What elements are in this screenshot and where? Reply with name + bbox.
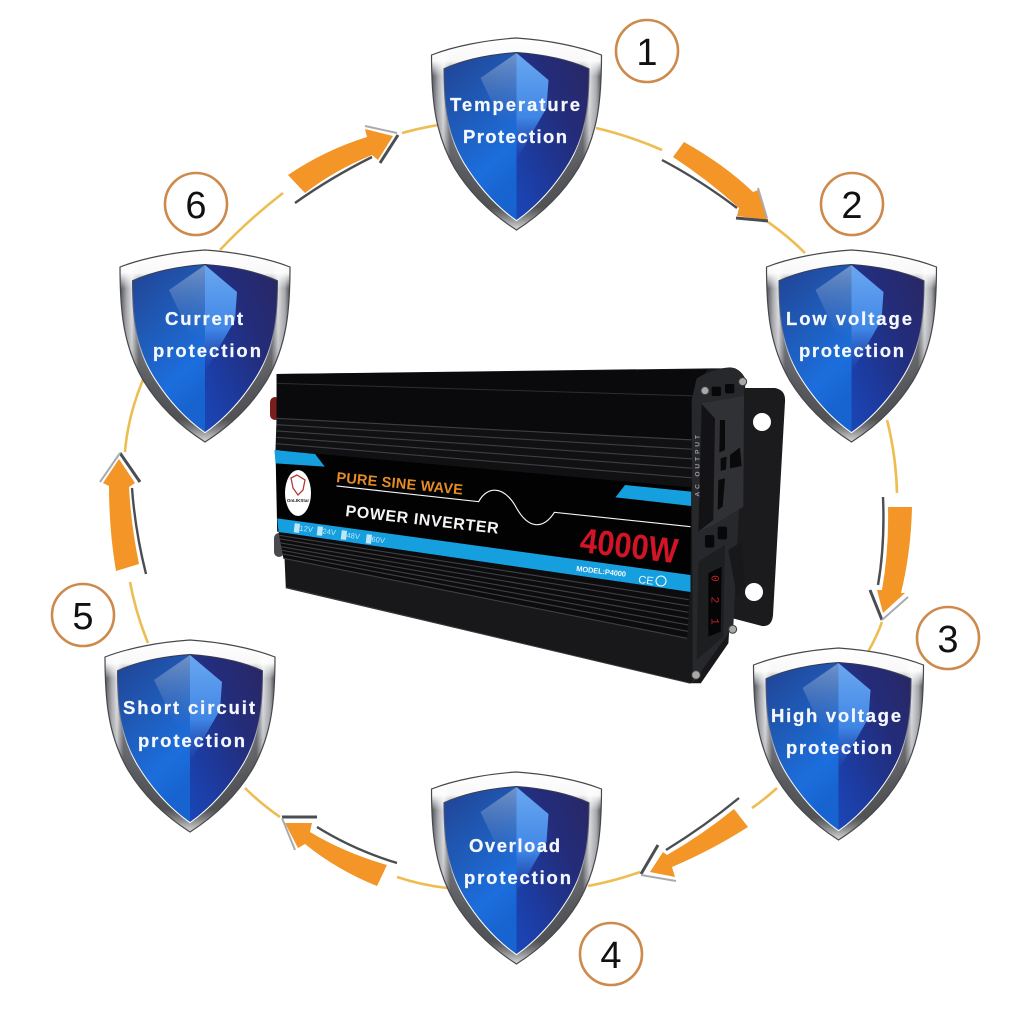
number badge 6 (165, 173, 227, 235)
number badge 1 (616, 20, 678, 82)
screws (692, 378, 747, 679)
digital display: 021 (708, 575, 720, 625)
arrow: 1 to 2 (662, 142, 768, 221)
voltage options: █48V (341, 530, 360, 542)
ring connector: yellow arc segments (125, 125, 897, 888)
logo badge: OnLIKStar (287, 498, 309, 503)
number badge 1: 1 (636, 32, 658, 74)
number badge 5: 5 (72, 596, 94, 638)
shield 4: Overload protection (432, 772, 602, 964)
shield 3: High voltage protection: High voltage (771, 705, 901, 726)
shield 6: Current protection: Current (165, 308, 243, 329)
number badge 2: 2 (841, 185, 863, 227)
number badge 6: 6 (185, 185, 207, 227)
model and marks: CE (638, 574, 654, 588)
heading: power inverter: POWER INVERTER (345, 503, 500, 538)
voltage options: █12V (294, 523, 313, 535)
shield 5: Short circuit protection (105, 640, 275, 832)
mounting bracket (720, 388, 785, 626)
logo badge (285, 470, 311, 516)
number badge 3: 3 (937, 619, 959, 661)
model and marks: MODEL:P4000 (576, 564, 626, 579)
terminals (270, 397, 284, 557)
AC output label: AC OUTPUT (694, 435, 701, 497)
wattage: 4000W: 4000W (578, 521, 680, 571)
shield 2: Low voltage protection (766, 250, 936, 442)
shield 1: Temperature Protection: Temperature (450, 94, 580, 115)
vents (705, 384, 734, 548)
voltage options: █60V (366, 534, 385, 546)
digital display (697, 545, 725, 660)
shield 1: Temperature Protection (432, 38, 602, 230)
shield 6: Current protection: protection (153, 340, 261, 361)
arrow: 5 to 6 (100, 453, 146, 574)
number badge 3 (917, 607, 979, 669)
number badge 4 (580, 923, 642, 985)
model and marks (576, 564, 666, 588)
arrow: 2 to 3 (870, 497, 912, 620)
end panel with socket, display and switch (692, 367, 747, 683)
shield 2: Low voltage protection: Low voltage (786, 308, 912, 329)
shield 6: Current protection (120, 250, 290, 442)
shield 4: Overload protection: Overload (469, 835, 560, 856)
arrow: 6 to 1 (288, 126, 398, 203)
voltage options: █24V (317, 526, 336, 538)
bracket holes (745, 413, 771, 601)
arrow: 4 to 5 (282, 817, 397, 886)
shield 3: High voltage protection (754, 648, 924, 840)
shield 1: Temperature Protection: Protection (463, 126, 567, 147)
number badge 4: 4 (600, 935, 622, 977)
number badge 5 (52, 584, 114, 646)
shield 5: Short circuit protection: Short circuit (123, 697, 255, 718)
socket (698, 396, 744, 532)
shield 4: Overload protection: protection (464, 867, 571, 888)
switch (728, 542, 745, 595)
shield 3: High voltage protection: protection (786, 737, 892, 758)
voltage options (294, 523, 385, 546)
shield 5: Short circuit protection: protection (138, 730, 245, 751)
shield 2: Low voltage protection: protection (799, 340, 904, 361)
arrow: 3 to 4 (641, 798, 748, 881)
power inverter product (270, 367, 785, 683)
number badge 2 (821, 173, 883, 235)
heading: pure sine wave: PURE SINE WAVE (336, 470, 464, 499)
inverter body (274, 368, 746, 683)
